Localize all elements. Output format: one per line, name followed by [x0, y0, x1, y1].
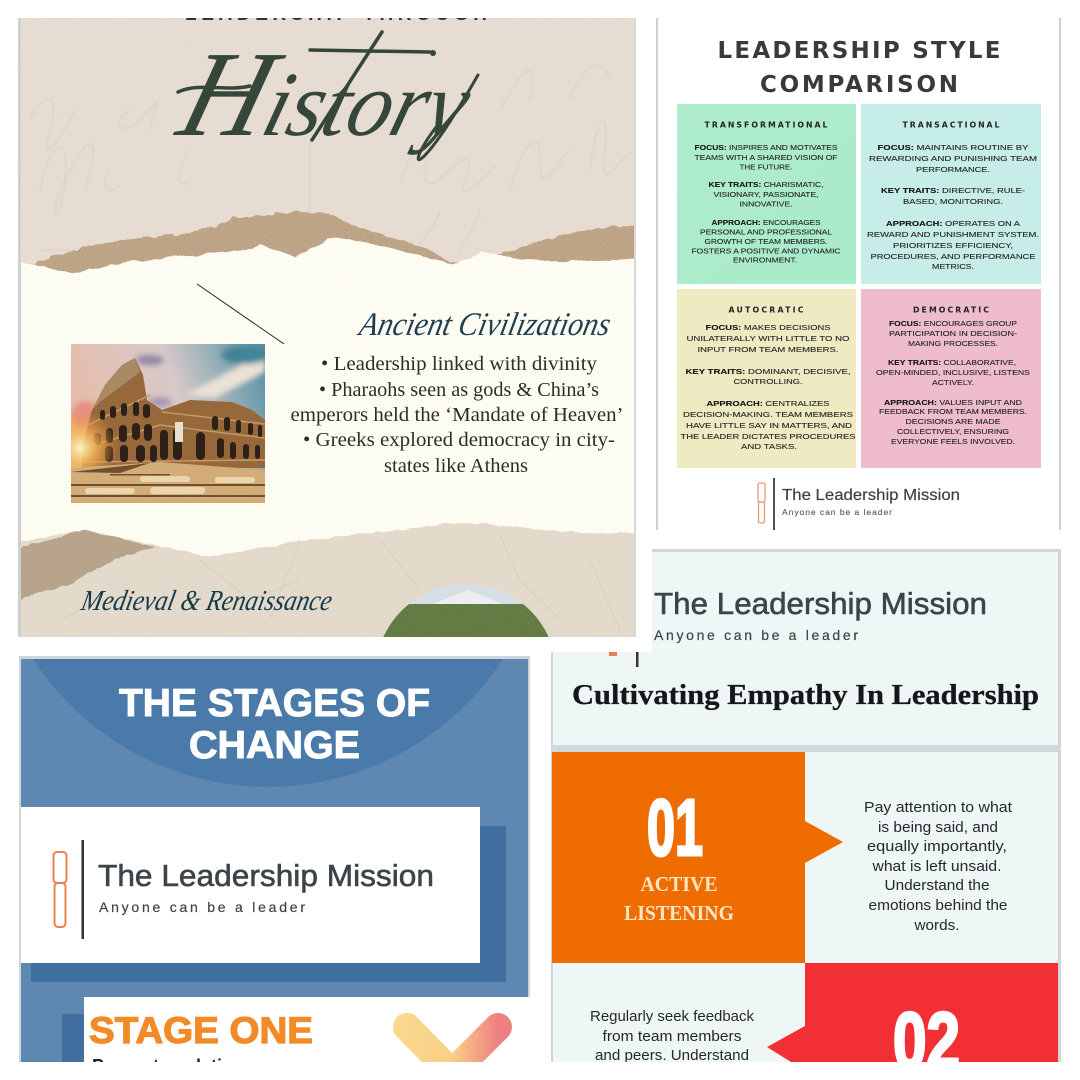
torn paper strip: tan [34, 210, 634, 274]
card: transactional: TRANSACTIONAL [902, 120, 1000, 130]
card: transformational: KEY TRAITS: CHARISMATIC, [708, 180, 824, 189]
card: transformational: TEAMS WITH A SHARED VISION OF [694, 153, 838, 162]
card: autocratic: KEY TRAITS: DOMINANT, DECISIVE, [686, 367, 850, 376]
card: democratic: OPEN-MINDED, INCLUSIVE, LISTENS [876, 368, 1030, 377]
card: democratic: COLLECTIVELY, ENSURING [897, 427, 1009, 436]
heading: leadership style comparison [720, 40, 999, 92]
card: autocratic: THE LEADER DICTATES PROCEDURES [680, 432, 856, 441]
card: transactional: KEY TRAITS: DIRECTIVE, RULE- [881, 186, 1026, 195]
card: transformational: TRANSFORMATIONAL [704, 120, 828, 130]
text: active listening description: equally importantly, [867, 839, 1007, 855]
card: autocratic: FOCUS: MAKES DECISIONS [706, 323, 830, 332]
block 01: active listening: LISTENING [624, 901, 734, 925]
logo text: the leadership mission header: Anyone can be a leader [654, 627, 858, 643]
heading: the stages of change: THE STAGES OF [119, 682, 430, 725]
text: ancient civilizations bullets: states like Athens [384, 456, 528, 477]
text: feedback description: Regularly seek feedback [590, 1009, 755, 1025]
card: democratic: FOCUS: ENCOURAGES GROUP [889, 319, 1017, 328]
card: autocratic: CONTROLLING. [734, 377, 802, 386]
heading: cultivating empathy: Cultivating Empathy In Leadership [572, 680, 1039, 711]
block 01: active listening [552, 752, 843, 963]
card: transformational: INNOVATIVE. [740, 200, 792, 208]
logo card shadow [31, 826, 506, 982]
card: transformational: FOCUS: INSPIRES AND MOTIVATES [694, 143, 838, 152]
text: ancient civilizations bullets [290, 354, 624, 477]
text: active listening description: words. [913, 918, 960, 934]
card: transactional [861, 104, 1041, 284]
card: autocratic: HAVE LITTLE SAY IN MATTERS, AND [686, 421, 853, 430]
card: democratic: APPROACH: VALUES INPUT AND [884, 398, 1023, 407]
card: democratic: MAKING PROCESSES. [908, 339, 998, 348]
card: transactional: PERFORMANCE. [916, 165, 990, 174]
card: transactional: APPROACH: OPERATES ON A [886, 219, 1021, 228]
heading: the stages of change: CHANGE [189, 724, 360, 767]
logo: the leadership mission [758, 478, 960, 530]
heading: Ancient Civilizations: Ancient Civilizations [355, 306, 614, 343]
text: ancient civilizations bullets: • Leadership linked with divinity [321, 354, 597, 375]
panel: leadership through history [18, 4, 640, 640]
text: ancient civilizations bullets: • Pharaohs seen as gods & China’s [319, 380, 599, 401]
photo: colosseum [71, 344, 265, 503]
card: autocratic: UNILATERALLY WITH LITTLE TO NO [686, 334, 850, 343]
block 02 [767, 963, 1058, 1062]
card: transformational: GROWTH OF TEAM MEMBERS. [704, 237, 828, 246]
heading: leadership through, clipped: LEADERSHIP THROUGH [185, 4, 487, 25]
card: transactional: FOCUS: MAINTAINS ROUTINE BY [878, 143, 1028, 152]
logo fragment [609, 652, 638, 667]
icon: chevron [407, 1027, 498, 1073]
logo text: the leadership mission header [654, 586, 987, 643]
marble veins [60, 535, 620, 630]
text: ancient civilizations bullets: emperors held the ‘Mandate of Heaven’ [290, 405, 624, 426]
card: transformational: PERSONAL AND PROFESSIONAL [700, 228, 832, 236]
block 01: active listening: ACTIVE [640, 872, 718, 896]
card: democratic: FEEDBACK FROM TEAM MEMBERS. [879, 407, 1027, 416]
text: active listening description [864, 800, 1012, 934]
card: autocratic: INPUT FROM TEAM MEMBERS. [698, 345, 838, 354]
card: democratic: DECISIONS ARE MADE [906, 417, 1000, 426]
card: democratic: ACTIVELY. [932, 378, 974, 387]
stage card shadow [62, 1014, 84, 1062]
logo card [21, 807, 480, 963]
card: democratic: PARTICIPATION IN DECISION- [889, 329, 1018, 338]
panel: the stages of change [19, 656, 530, 1077]
heading: the stages of change [118, 688, 430, 759]
text: feedback description: and peers. Understand [595, 1048, 749, 1064]
card: transactional: REWARDING AND PUNISHING TEAM [869, 154, 1037, 163]
card: autocratic: DECISION-MAKING. TEAM MEMBERS [683, 410, 853, 419]
white frame overlap [0, 18, 652, 652]
card: transformational: APPROACH: ENCOURAGES [712, 218, 820, 227]
card: democratic: EVERYONE FEELS INVOLVED. [891, 437, 1015, 446]
card: autocratic [677, 289, 856, 468]
card: stage one: Precontemplation: [92, 1056, 250, 1076]
photo: landscape circle [383, 584, 549, 637]
heading: leadership style comparison: COMPARISON [760, 72, 958, 98]
card: democratic [861, 289, 1041, 468]
card: transactional: BASED, MONITORING. [903, 197, 1003, 206]
logo: the leadership mission: Anyone can be a leader [782, 507, 892, 517]
text: feedback description: from team members [602, 1029, 742, 1045]
panel: cultivating empathy in leadership [551, 549, 1061, 1080]
block 01: active listening: 01 [647, 783, 703, 872]
panel: leadership style comparison [656, 18, 1061, 530]
text: active listening description: Pay attention to what [864, 800, 1012, 816]
card: autocratic: APPROACH: CENTRALIZES [706, 399, 830, 408]
card: transactional: REWARD AND PUNISHMENT SYSTEM. [867, 230, 1039, 239]
card: stage one [84, 997, 530, 1062]
handwriting texture [50, 68, 632, 214]
connector line [197, 284, 284, 344]
heading: leadership style comparison: LEADERSHIP STYLE [718, 38, 1000, 64]
card: transactional: PROCEDURES, AND PERFORMANCE [870, 252, 1036, 261]
card: transformational: ENVIRONMENT. [733, 256, 797, 264]
text: feedback description [590, 1009, 755, 1064]
torn paper: cream body [21, 237, 634, 556]
logo card: Anyone can be a leader [99, 899, 305, 915]
card: transactional: PRIORITIZES EFFICIENCY, [893, 241, 1013, 250]
card: transformational: FOSTERS A POSITIVE AND DYNAMIC [692, 246, 841, 256]
logo card: The Leadership Mission [98, 858, 434, 893]
text: active listening description: what is left unsaid. [871, 859, 1002, 875]
card: transformational: VISIONARY, PASSIONATE, [714, 190, 818, 199]
text: ancient civilizations bullets: • Greeks explored democracy in city- [303, 430, 615, 451]
heading: History: History [165, 26, 491, 161]
text: active listening description: Understand the [884, 878, 990, 894]
logo: the leadership mission: The Leadership Mission [782, 487, 960, 504]
logo text: the leadership mission header: The Leadership Mission [654, 586, 987, 621]
card: democratic: KEY TRAITS: COLLABORATIVE, [888, 358, 1016, 367]
card: transformational: THE FUTURE. [740, 162, 792, 172]
card: transformational [677, 104, 856, 284]
heading: Medieval & Renaissance: Medieval & Renaissance [78, 585, 335, 617]
card: transactional: METRICS. [932, 262, 974, 271]
card: democratic: DEMOCRATIC [913, 306, 989, 314]
card: autocratic: AND TASKS. [741, 442, 797, 451]
torn paper: bottom section [18, 522, 640, 640]
card: stage one: STAGE ONE [89, 1010, 313, 1051]
grain overlay [18, 18, 636, 637]
text: active listening description: emotions behind the [868, 898, 1008, 914]
torn paper: tan corner [18, 530, 156, 600]
text: active listening description: is being said, and [878, 820, 998, 836]
header semicircle [33, 659, 503, 787]
card: autocratic: AUTOCRATIC [728, 306, 804, 314]
